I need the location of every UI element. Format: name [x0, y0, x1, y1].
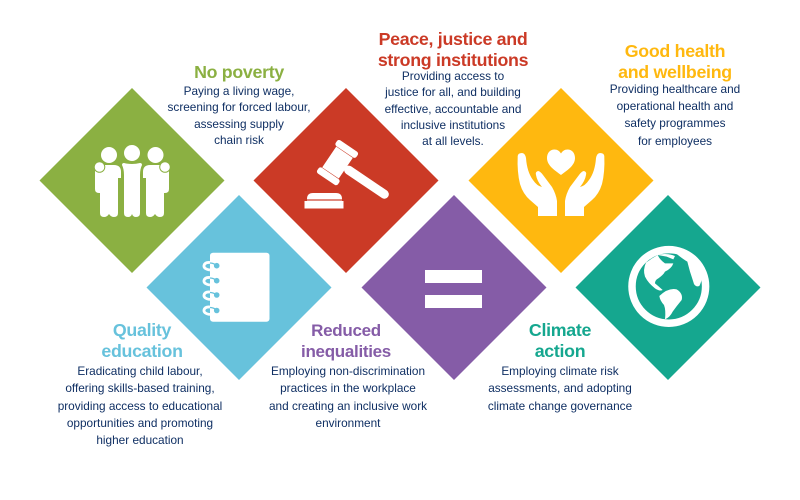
- heading: reduced inequalities: [301, 321, 391, 361]
- text: reduced inequalities: Employing non-discrimination: [271, 364, 425, 378]
- text: no poverty: [168, 84, 310, 147]
- text: no poverty: Paying a living wage,: [184, 84, 294, 98]
- heading: peace: strong institutions: [378, 50, 528, 70]
- heading: quality education: education: [101, 341, 183, 361]
- heading: climate action: action: [535, 341, 585, 361]
- text: quality education: providing access to educational: [58, 399, 222, 413]
- panel: reduced inequalities diamond: [362, 195, 546, 380]
- heading: climate action: [529, 320, 591, 361]
- icon: three people: [94, 145, 170, 217]
- panel: no poverty diamond: [40, 88, 224, 273]
- panel: climate action diamond: [576, 195, 760, 380]
- panel: good health diamond: [468, 88, 654, 273]
- text: climate action: assessments, and adopting: [488, 381, 632, 395]
- text: quality education: Eradicating child labour,: [77, 364, 203, 378]
- icon: gavel: [304, 139, 399, 213]
- text: peace: Providing access to: [402, 69, 504, 83]
- heading: reduced inequalities: inequalities: [301, 342, 391, 361]
- text: quality education: [58, 364, 222, 447]
- text: reduced inequalities: [269, 364, 427, 430]
- heading: good health: [618, 41, 732, 82]
- heading: quality education: [101, 320, 183, 361]
- heading: peace: [378, 29, 528, 70]
- text: climate action: climate change governance: [488, 399, 632, 413]
- heading: reduced inequalities: Reduced: [311, 321, 381, 340]
- text: peace: at all levels.: [422, 134, 484, 148]
- icon: globe: [632, 250, 706, 323]
- text: good health: for employees: [638, 134, 712, 148]
- text: quality education: higher education: [96, 433, 184, 447]
- text: good health: Providing healthcare and: [610, 82, 740, 96]
- text: good health: safety programmes: [625, 116, 725, 130]
- text: climate action: Employing climate risk: [501, 364, 619, 378]
- text: good health: [610, 82, 740, 148]
- heading: no poverty: No poverty: [194, 62, 284, 82]
- text: no poverty: chain risk: [214, 133, 264, 147]
- text: no poverty: assessing supply: [194, 117, 284, 131]
- heading: quality education: Quality: [113, 320, 171, 340]
- text: reduced inequalities: practices in the workplace: [280, 381, 416, 395]
- text: good health: operational health and: [617, 99, 733, 113]
- text: peace: justice for all, and building: [385, 85, 521, 99]
- panel: peace diamond: [254, 88, 438, 273]
- icon: hands holding heart: [518, 150, 604, 216]
- icon: notebook: [204, 253, 270, 322]
- panel: quality education diamond: [146, 195, 332, 380]
- text: reduced inequalities: and creating an inclusive work: [269, 399, 427, 413]
- text: peace: [384, 69, 521, 148]
- text: peace: inclusive institutions: [401, 118, 505, 132]
- text: peace: effective, accountable and: [385, 102, 521, 116]
- text: reduced inequalities: environment: [316, 416, 380, 430]
- text: no poverty: screening for forced labour,: [168, 100, 310, 114]
- text: quality education: offering skills-based training,: [65, 381, 215, 395]
- heading: good health: and wellbeing: [618, 62, 732, 82]
- text: quality education: opportunities and promoting: [67, 416, 213, 430]
- heading: climate action: Climate: [529, 320, 591, 340]
- icon: equals sign: [425, 270, 482, 308]
- heading: good health: Good health: [625, 41, 725, 61]
- heading: peace: Peace, justice and: [379, 29, 527, 49]
- text: climate action: [488, 364, 632, 413]
